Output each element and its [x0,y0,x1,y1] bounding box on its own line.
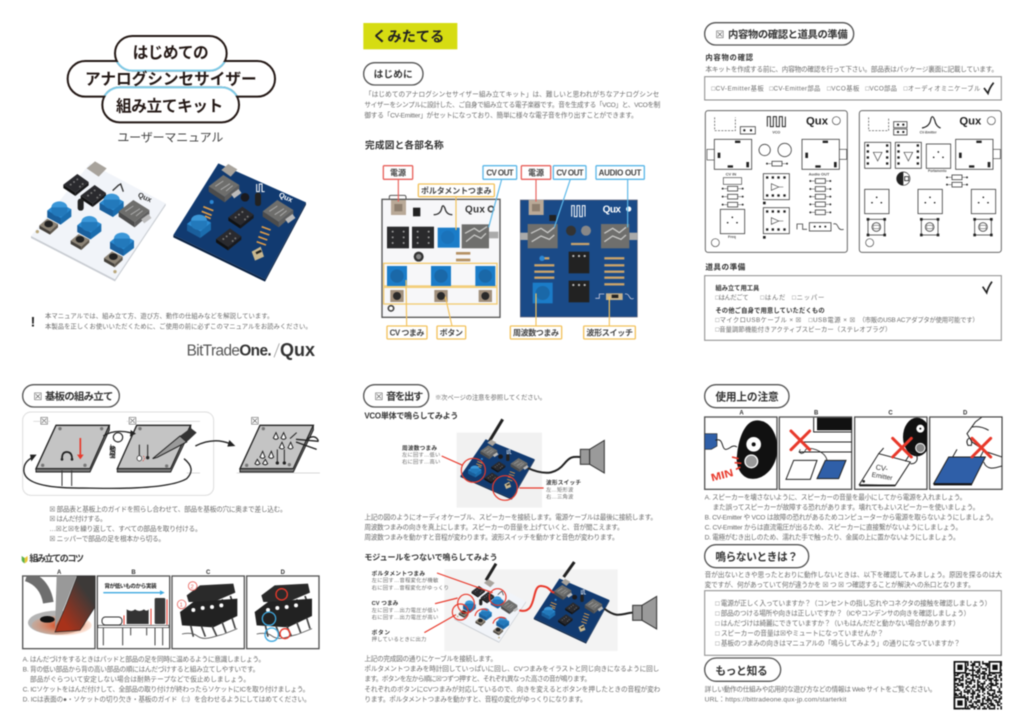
caution C [855,417,931,489]
contents note: 本キットを作成する前に、内容物の確認を行って下さい。部品表はパッケージ裏面に記載しています。 [705,65,998,74]
heading: intro [364,63,423,85]
tip labels: C [206,570,211,576]
heading: learn more: もっと知る [715,664,768,677]
caution text: また誤ってスピーカーが故障する恐れがあります。壊れてもよいスピーカーを使いましょう。 [713,503,979,512]
photo: VCO blue board [173,163,306,282]
heading: make sound [364,385,429,407]
caution text [705,493,997,542]
label: portamento knob [418,184,494,197]
tip C: IC socket: 2 [191,584,194,590]
label: portamento knob: ポルタメントつまみ [421,185,492,195]
label: portamento knob: ポルタメントつまみ [372,569,425,577]
title badge: はじめての [133,44,209,62]
heading: assembly tips: 組み立てのコツ [29,553,84,564]
assembly steps illustration: ☒ [128,417,137,428]
logo: BitTradeOne / Qux: BitTradeOne. [187,342,272,359]
label: CV OUT: CV OUT [486,168,514,177]
assembly steps illustration: ☒ [250,417,259,428]
module instructions: ポルタメントつまみを時計回していっぱいに回し、CVつまみをイラストと同じ向きになるように回し [364,664,659,673]
board layout: VCO: Freq [728,235,736,239]
diagram: CV-Emitter board: Qux [465,204,485,215]
caution text: B. CV-Emitter や VCO は故障の恐れがあるためコンピューターから電源を取らないようにしましょう。 [705,513,997,522]
notice [31,311,312,330]
label: waveform switch: 波形スイッチ [586,327,633,337]
panel: assembly intro page [363,23,661,339]
caution text: D. 電極がむき出しのため、濡れた手で触ったり、金属の上に置かないようにしましょう。 [705,533,960,542]
logo: BitTradeOne / Qux [187,339,316,360]
label: CV knob [387,326,427,339]
board layout: CV-Emitter: Portamento [928,169,946,173]
board layout: CV-Emitter [859,111,1001,252]
notice: 本マニュアルでは、組み立て方、遊び方、動作の仕組みなどを解説しています。 [45,311,273,320]
heading: no sound [705,545,809,568]
caution C: CV- [875,462,889,474]
step text [49,504,287,543]
label: CV OUT (VCO) [553,166,586,179]
section banner: くみたてる [373,28,444,45]
label: frequency knob: 周波数つまみ [513,327,559,337]
tips text: C. ICソケットをはんだ付けして、全部品の取り付けが終わったらソケットにICを取り付けましょう。 [23,685,309,694]
heading: intro: はじめに [374,69,413,80]
arrowheads [30,430,235,461]
label: button [372,628,426,643]
label: portamento knob [372,569,449,591]
checklist: contents: □VCO部品 [865,85,897,93]
label: waveform switch: 波形スイッチ [546,479,581,487]
tips text: B. 背の低い部品から背の高い部品の順にはんだづけすると組み立てしやすいです。 [23,664,259,673]
photo: CV-Emitter white board: Qux [137,190,154,205]
tips text: 部品がぐらついて安定しない場合は耐熱テープなどで仮止めしましょう。 [30,674,250,683]
board layout: VCO [705,111,847,252]
checklist: tools: 組み立て用工具 [715,283,760,292]
label: power (VCO): 電源 [528,167,544,177]
checklist: tools: □ニッパー [792,294,824,302]
checklist: tools: その他ご自身で用意していただくもの [715,305,825,314]
heading: no sound: 鳴らないときは？ [715,551,798,564]
tip B: order by height: 背が低いものから実装 [104,582,157,590]
photo: VCO blue board: Qux [278,190,295,205]
board layout: VCO: Audio OUT [809,171,830,176]
step text: ☒ 部品表と基板上のガイドを照らし合わせて、部品を基板の穴に奥まで差し込む。 [49,504,287,513]
caution labels [739,411,968,417]
board step 1 [36,425,109,486]
heading: make sound: 音を出す [386,390,423,403]
caution A [705,417,777,489]
no-sound intro: 変ですが、何があっていて何が違うかを ☒ つ ☒ つ確認することが解決への糸口となります。 [705,580,975,589]
heading: contents and tools: ☒ [715,30,724,41]
checklist: tools [705,276,1001,340]
illustration: connected modules [424,562,657,651]
tip labels: A [57,570,62,576]
heading: learn more [705,658,781,681]
notice: 本製品を正しくお使いいただくために、ご使用の前に必ずこのマニュアルをお読みください。 [45,321,312,330]
label: waveform switch [584,326,635,339]
step text: ☒ ニッパーで部品の足を根本から切る。 [49,534,165,543]
tip B: order by height [97,576,170,649]
title badge: アナログシンセサイザー [85,70,257,89]
label: power [383,166,413,179]
repeat label: 繰り返す [109,444,117,459]
caution labels: C [888,411,893,417]
heading: make sound: ☒ [374,392,383,403]
checklist: tools: □はんだ [760,294,786,302]
tip labels: D [281,570,286,576]
step text: …☒と☒を繰り返して、すべての部品を取り付ける。 [49,524,202,533]
diagram: VCO board [520,200,637,317]
checklist: troubleshooting: □ 電源が正しく入っていますか？（コンセントの指し忘れやコネクタの接触を確認しましょう） [715,599,991,608]
more info text [705,685,936,704]
checklist: tools: □音量調節機能付きアクティブスピーカー（ステレオプラグ） [715,325,891,334]
panel: board assembly page [22,385,320,704]
title badge [68,36,275,122]
intro text: 「はじめてのアナログシンセサイザー組み立てキット」は、難しいと思われがちなアナログシンセ [365,90,659,99]
illustration: VCO setup [442,419,604,508]
title badge: 組み立てキット [116,98,223,116]
checklist: troubleshooting: □ スピーカーの音量は☒やミュートになっていませんか？ [715,628,884,637]
caution labels: B [814,411,819,417]
caution B [779,417,852,489]
intro text [364,90,661,119]
label: CV knob: 右に回す…出力電圧が高い [372,613,438,621]
label: frequency knob: 周波数つまみ [402,444,437,452]
diagram: VCO board: Qux [603,204,621,215]
assembly steps illustration: ☒ [40,417,49,428]
module instructions [364,654,661,704]
label: power: 電源 [390,167,406,177]
step text: ☒ はんだ付けする。 [49,514,107,523]
QR code [954,661,1002,709]
assembly steps illustration [23,412,320,495]
checklist: tools: □マイクロUSBケーブル × ☒ [715,315,802,324]
caution labels: A [739,411,744,417]
checklist: troubleshooting: □ 基板のつまみの向きはマニュアルの「鳴らしてみよう」の通りになっていますか？ [715,638,960,647]
caution text: C. CV-Emitter からは直流電圧が出るため、スピーカーに直接繋がないようにしましょう。 [705,523,962,532]
checklist: contents: □CV-Emitter部品 [769,85,820,93]
checklist: contents [705,77,1001,100]
checklist: tools: □USB電源 × ☒ [809,315,856,324]
subheading: connect modules: モジュールをつないで鳴らしてみよう [364,552,498,562]
subheading: VCO alone: VCO単体で鳴らしてみよう [364,410,458,420]
checklist: contents: □VCO基板 [827,84,860,93]
tips text [23,655,311,704]
tip labels: B [131,570,136,576]
label: CV knob: 左に回す…出力電圧が低い [372,606,438,614]
board layout: VCO: CV IN [726,171,736,176]
no-sound intro [705,570,1002,589]
checklist: contents: □CV-Emitter基板 [711,84,764,93]
note: ※次ページの注意を参照してください。 [435,392,546,401]
subtitle: ユーザーマニュアル [117,131,223,145]
tip A: soldering [23,576,95,649]
label: frequency knob [510,326,562,339]
callout lines [398,179,628,326]
checklist: contents: □オーディオミニケーブル [904,84,981,93]
label: button [437,326,466,339]
VCO instructions [364,512,657,541]
intro text: 御する「CV-Emitter」がセットになっており、簡単に様々な電子音を作り出すことができます。 [364,110,638,119]
panel: cautions page [705,385,1002,709]
label: AUDIO OUT [596,166,644,179]
heading: cautions [705,385,789,408]
module instructions: ます。ボタンを左から順に☒つずつ押すと、それぞれ異なった高さの音が鳴ります。 [364,674,591,683]
heading: contents and tools: 内容物の確認と道具の準備 [728,28,848,41]
tips text: A. はんだづけをするときはパッドと部品の足を同時に温めるように意識しましょう。 [23,655,265,664]
VCO instructions: 周波数つまみを動かすと音程が変わります。波形スイッチを動かすと音色が変わります。 [364,532,619,541]
logo: BitTradeOne / Qux: Qux [280,339,316,360]
label: button: ボタン [440,327,463,337]
label: frequency knob [402,444,440,465]
checklist: troubleshooting [705,591,1001,655]
panel: make sound page [364,385,661,704]
panel: contents and tools page [705,23,1001,340]
caution A: MIN [710,467,735,484]
intro text: サイザーをシンプルに設計した、ご自身で組み立てる電子楽器です。音を生成する「VCO」と、VCOを制 [364,100,661,109]
no-sound intro: 音が出ないときや思ったとおりに動作しないときは、以下を確認してみましょう。原因を探るのは大 [705,570,1002,579]
label: portamento knob: 左に回す…音程変化が機敏 [372,576,439,584]
checklist: tools: （市販のUSB ACアダプタが使用可能です） [859,315,979,324]
tip labels [57,570,286,576]
label: waveform switch: 左…矩形波 [546,486,574,494]
tip C: IC socket [172,576,244,649]
checklist: troubleshooting: □ 部品のつける場所や向きは正しいですか？（ICやコンデンサの向きを確認しましょう） [715,608,970,617]
label: CV knob: CV つまみ [390,328,424,337]
label: waveform switch: 右…三角波 [546,492,574,500]
module instructions: それぞれのボタンにCVつまみが対応しているので、向きを変えるとボタンを押したときの音程が変わ [364,685,661,694]
board layout: VCO: VCO [772,131,780,135]
subheading: contents: 内容物の確認 [705,53,754,62]
VCO instructions: 周波数つまみの向きを真上にします。スピーカーの音量を上げていくと、音が聞こえます。 [364,522,624,531]
board step 2 [117,425,197,472]
label: CV knob: CV つまみ [372,600,399,607]
board layout: CV-Emitter: CV-Emitter [920,131,937,135]
caution labels: D [963,411,968,417]
caution C: Emitter [871,472,894,482]
tips text: D. ICは表面の●・ソケットの切り欠き・基板のガイド（□）を合わせるようにしてはめてください。 [23,695,311,704]
label: CV OUT (VCO): CV OUT [556,168,584,177]
tip C: IC socket: 1 [180,603,183,609]
section banner [363,23,457,49]
tip D: alignment [247,576,319,649]
label: frequency knob: 左に回す…低い [402,451,440,459]
photo: CV-Emitter white board [31,161,166,281]
diagram: CV-Emitter board [382,195,500,317]
caution text: A. スピーカーを壊さないように、スピーカーの音量を最小にしてから電源を入れましょう。 [705,493,966,502]
heading: cautions: 使用上の注意 [715,391,779,404]
label: button: 押しているときに出力 [372,635,426,643]
label: AUDIO OUT: AUDIO OUT [599,168,641,177]
subheading: tools: 道具の準備 [705,261,746,271]
checklist: tools: □はんだごて [715,293,749,302]
label: frequency knob: 右に回す…高い [402,457,440,465]
label: power (VCO) [521,166,551,179]
panel: cover page [31,36,316,360]
more info text: URL：https://bittradeone.qux-jp.com/starterkit [705,697,846,704]
label: waveform switch [546,479,581,500]
checklist: troubleshooting: □ はんだづけは綺麗にできていますか？（いもはんだだと動かない場合があります） [715,618,960,627]
label: button: ボタン [372,628,390,636]
heading: board assembly: 基板の組み立て [45,390,113,403]
notice: ! [31,314,35,330]
arrows between steps [24,431,230,488]
heading: contents and tools [705,23,854,45]
module instructions: ります。ポルタメントつまみを動かすと、音程の変化がゆっくりになります。 [364,695,587,704]
board layout: CV-Emitter: Qux [959,115,982,127]
heading: board assembly [23,385,119,407]
module instructions: 上記の完成図の通りにケーブルを接続します。 [364,654,497,663]
more info text: 詳しい動作の仕組みや応用的な遊び方などの情報は Web サイトをご覧ください。 [705,685,936,694]
heading: parts names: 完成図と各部名称 [365,139,444,151]
VCO instructions: 上記の図のようにオーディオケーブル、スピーカーを接続します。電源ケーブルは最後に接続します。 [364,512,657,521]
label: CV knob [372,600,438,621]
heading: board assembly: ☒ [33,392,42,403]
label: CV OUT [483,166,517,179]
board layout: VCO: Qux [806,115,829,127]
label: portamento knob: 右に回す…音程変化がゆっくり [372,583,449,591]
caution D [930,417,1002,489]
board step 3 [240,425,319,472]
